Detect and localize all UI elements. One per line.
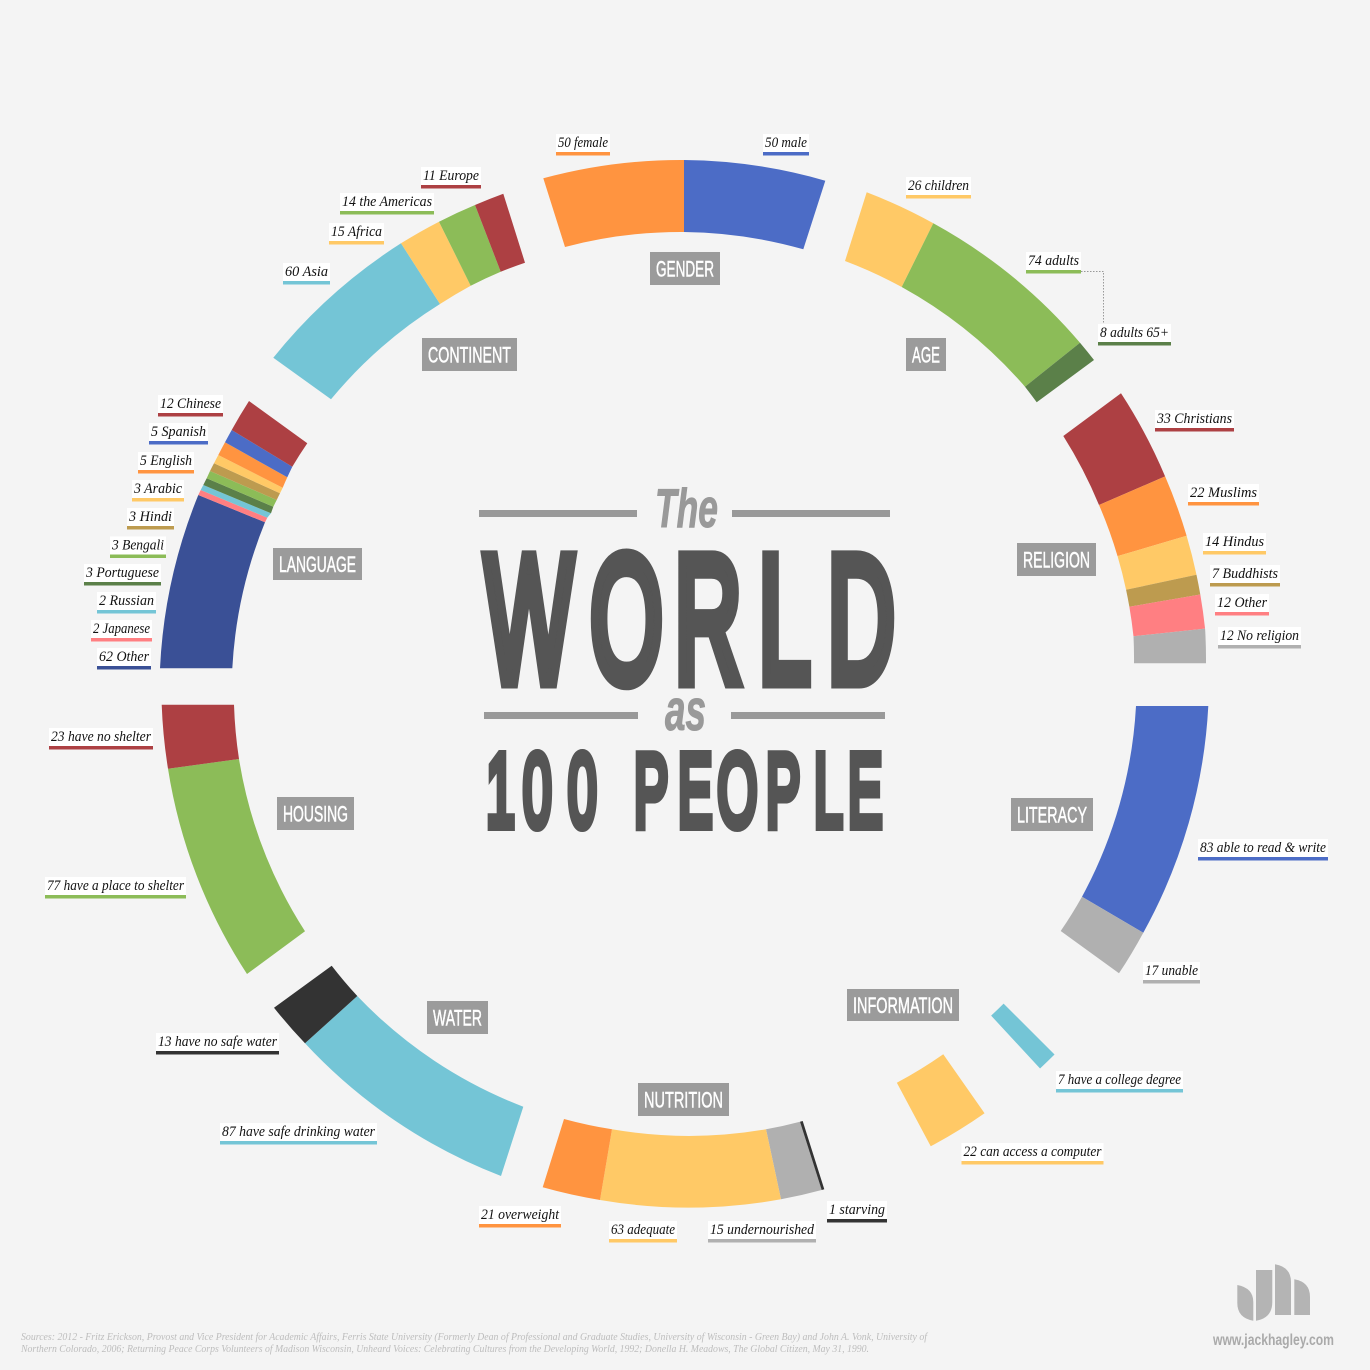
- sources text: Sources: 2012 - Fritz Erickson, Provost and Vice President for Academic Affairs, Ferris State University (Formerly Dean of Professional and Graduate Studies, University of Wisconsin - Green Bay) and John A. Vonk, University of: [21, 1332, 929, 1343]
- label: 33 Christians: 33 Christians: [1156, 411, 1232, 427]
- label: 2 Japanese: 2 Japanese: [93, 621, 150, 637]
- segment: 62 Other: [160, 495, 265, 668]
- label: 3 Portuguese: 3 Portuguese: [85, 565, 159, 581]
- segment: 63 adequate: [600, 1129, 781, 1208]
- heading: literacy: LITERACY: [1017, 802, 1087, 828]
- panel: religion: [1017, 393, 1301, 663]
- label: 12 No religion: 12 No religion: [1220, 628, 1299, 644]
- heading: language: [273, 548, 362, 580]
- panel: water: [156, 966, 523, 1176]
- label: 12 Other: [1215, 594, 1269, 616]
- segment: 17 unable: [1061, 897, 1143, 973]
- heading: age: AGE: [912, 342, 940, 368]
- segment: 8 adults 65+: [1025, 343, 1094, 402]
- heading: water: WATER: [433, 1006, 482, 1030]
- heading: age: [906, 338, 946, 371]
- label: 21 overweight: 21 overweight: [481, 1207, 560, 1223]
- title: as: as: [665, 678, 706, 743]
- label: 11 Europe: 11 Europe: [423, 168, 479, 184]
- label: 7 have a college degree: [1056, 1071, 1183, 1092]
- segment: 12 Chinese: [232, 401, 307, 467]
- dotted leader line: [1081, 272, 1104, 323]
- label: 2 Japanese: [91, 620, 152, 642]
- panel: nutrition: [479, 1083, 887, 1242]
- segment: 60 Asia: [273, 243, 440, 399]
- label: 26 children: 26 children: [908, 178, 969, 194]
- label: 3 Bengali: 3 Bengali: [111, 538, 164, 554]
- segment: 5 English: [218, 442, 287, 488]
- heading: water: [427, 1001, 488, 1034]
- heading: religion: RELIGION: [1023, 548, 1090, 572]
- heading: information: INFORMATION: [853, 993, 953, 1018]
- title block: [479, 477, 895, 849]
- segment: 77 have a place to shelter: [168, 759, 305, 974]
- label: 13 have no safe water: 13 have no safe water: [158, 1034, 277, 1050]
- panel: gender: [543, 134, 825, 285]
- segment: 2 Russian: [201, 485, 271, 518]
- segment: 50 female: [543, 160, 684, 247]
- segment: 87 have safe drinking water: [305, 996, 523, 1176]
- segment: 7 have a college degree: [989, 1003, 1055, 1069]
- label: 21 overweight: [479, 1206, 561, 1228]
- label: 12 Chinese: 12 Chinese: [160, 396, 221, 412]
- label: 3 Hindi: 3 Hindi: [128, 509, 172, 525]
- segment: 83 able to read and write: [1082, 706, 1208, 933]
- heading: nutrition: [638, 1083, 729, 1116]
- panel: age: [845, 177, 1171, 402]
- sources text: Northern Colorado, 2006; Returning Peace Corps Volunteers of Madison Wisconsin, Unheard Voices: Celebrating Cultures from the Developing World, 1992; Donella H. Meadows, The Global Citizen, May 31, 1990.: [20, 1344, 869, 1355]
- sources text: [20, 1332, 929, 1355]
- segment: 14 Hindus: [1116, 536, 1198, 595]
- segment: 3 Bengali: [207, 471, 277, 507]
- label: 17 unable: 17 unable: [1145, 963, 1198, 979]
- icon: jackhagley logo: [1237, 1264, 1310, 1321]
- label: 12 Other: 12 Other: [1217, 595, 1267, 611]
- label: 7 have a college degree: 7 have a college degree: [1058, 1072, 1181, 1088]
- label: 8 adults 65+: [1098, 324, 1171, 346]
- label: 63 adequate: [609, 1221, 677, 1242]
- panel: continent: [273, 167, 525, 399]
- segment: 15 undernourished: [766, 1122, 822, 1199]
- heading: nutrition: NUTRITION: [644, 1088, 723, 1112]
- label: 50 female: [556, 134, 610, 156]
- label: 87 have safe drinking water: 87 have safe drinking water: [222, 1124, 375, 1140]
- heading: language: LANGUAGE: [279, 552, 356, 577]
- panel: language: [84, 395, 362, 670]
- segment: 22 Muslims: [1096, 476, 1190, 564]
- label: 12 No religion: [1218, 627, 1301, 648]
- segment: 23 have no shelter: [162, 705, 239, 769]
- label: 8 adults 65+: 8 adults 65+: [1100, 325, 1169, 341]
- label: 5 English: 5 English: [140, 453, 192, 469]
- label: 3 Portuguese: [84, 564, 161, 586]
- heading: housing: HOUSING: [283, 802, 348, 826]
- label: 63 adequate: 63 adequate: [611, 1222, 675, 1238]
- segment: 3 Portuguese: [203, 478, 273, 513]
- segment: 50 male: [684, 160, 825, 249]
- label: 5 English: [138, 452, 194, 474]
- label: 2 Russian: 2 Russian: [99, 593, 154, 609]
- title: WORLD: WORLD: [485, 520, 895, 720]
- label: 13 have no safe water: [156, 1033, 279, 1054]
- segment: 26 children: [845, 192, 933, 287]
- label: 23 have no shelter: [49, 728, 153, 750]
- label: 62 Other: [97, 648, 151, 670]
- label: 1 starving: 1 starving: [829, 1202, 885, 1218]
- title: 100 PEOPLE: 100 PEOPLE: [486, 734, 882, 849]
- segment: 33 Christians: [1063, 393, 1165, 505]
- label: 77 have a place to shelter: [45, 877, 186, 898]
- segment: 13 have no safe water: [274, 966, 357, 1043]
- label: 17 unable: [1143, 962, 1200, 984]
- segment: 5 Spanish: [225, 430, 292, 477]
- label: 83 able to read & write: [1198, 839, 1328, 860]
- label: 14 Hindus: 14 Hindus: [1205, 534, 1264, 550]
- label: 11 Europe: [421, 167, 481, 188]
- segment: 1 starving: [800, 1121, 824, 1190]
- label: 74 adults: [1026, 252, 1081, 274]
- panel: housing: [45, 705, 354, 974]
- label: 62 Other: 62 Other: [99, 649, 149, 665]
- heading: information: [847, 989, 959, 1021]
- heading: gender: GENDER: [656, 256, 714, 282]
- segment: 21 overweight: [543, 1119, 612, 1200]
- segment: 3 Arabic: [214, 455, 283, 493]
- segment: 14 the Americas: [439, 205, 501, 286]
- heading: housing: [277, 797, 354, 830]
- label: 3 Arabic: [132, 480, 184, 502]
- label: 12 Chinese: [158, 395, 223, 416]
- label: 14 the Americas: 14 the Americas: [342, 194, 432, 210]
- label: 60 Asia: 60 Asia: [285, 264, 328, 280]
- label: 83 able to read & write: 83 able to read & write: [1200, 840, 1326, 856]
- segment: 7 Buddhists: [1126, 575, 1201, 609]
- label: 5 Spanish: 5 Spanish: [151, 424, 206, 440]
- label: 7 Buddhists: 7 Buddhists: [1212, 566, 1278, 582]
- label: 50 male: [763, 134, 809, 156]
- label: 22 Muslims: 22 Muslims: [1190, 485, 1257, 501]
- label: 23 have no shelter: 23 have no shelter: [51, 729, 151, 745]
- label: 22 can access a computer: [962, 1143, 1104, 1164]
- segment: 2 Japanese: [198, 490, 267, 522]
- label: 3 Arabic: 3 Arabic: [133, 481, 182, 497]
- heading: literacy: [1011, 798, 1093, 831]
- label: 3 Bengali: [110, 536, 166, 558]
- heading: continent: [422, 338, 517, 371]
- label: 15 Africa: [329, 223, 384, 244]
- label: 33 Christians: [1155, 410, 1234, 432]
- website credit: www.jackhagley.com: [1212, 1332, 1334, 1349]
- label: 15 undernourished: [708, 1221, 816, 1242]
- heading: continent: CONTINENT: [428, 342, 511, 368]
- segment: 3 Hindi: [210, 463, 280, 500]
- panel: literacy: [1011, 706, 1328, 984]
- label: 77 have a place to shelter: 77 have a place to shelter: [47, 878, 184, 894]
- segment: 22 can access a computer: [890, 1052, 985, 1149]
- segment: 12 Other: [1128, 594, 1206, 641]
- segment: 12 No religion: [1134, 629, 1206, 663]
- label: 87 have safe drinking water: [220, 1123, 377, 1144]
- heading: religion: [1017, 543, 1096, 576]
- heading: gender: [650, 252, 720, 285]
- label: 74 adults: 74 adults: [1028, 253, 1079, 269]
- label: 50 female: 50 female: [558, 135, 608, 151]
- segment: 74 adults: [902, 223, 1080, 387]
- label: 26 children: [906, 177, 971, 198]
- label: 15 undernourished: 15 undernourished: [710, 1222, 814, 1238]
- segment: 11 Europe: [475, 194, 525, 272]
- label: 1 starving: [827, 1201, 887, 1222]
- label: 50 male: 50 male: [765, 135, 807, 151]
- label: 15 Africa: 15 Africa: [331, 224, 382, 240]
- label: 22 can access a computer: 22 can access a computer: [964, 1144, 1102, 1160]
- label: 14 the Americas: [340, 193, 434, 214]
- panel: information: [847, 989, 1183, 1164]
- segment: 15 Africa: [401, 222, 471, 304]
- title: The: The: [655, 477, 718, 539]
